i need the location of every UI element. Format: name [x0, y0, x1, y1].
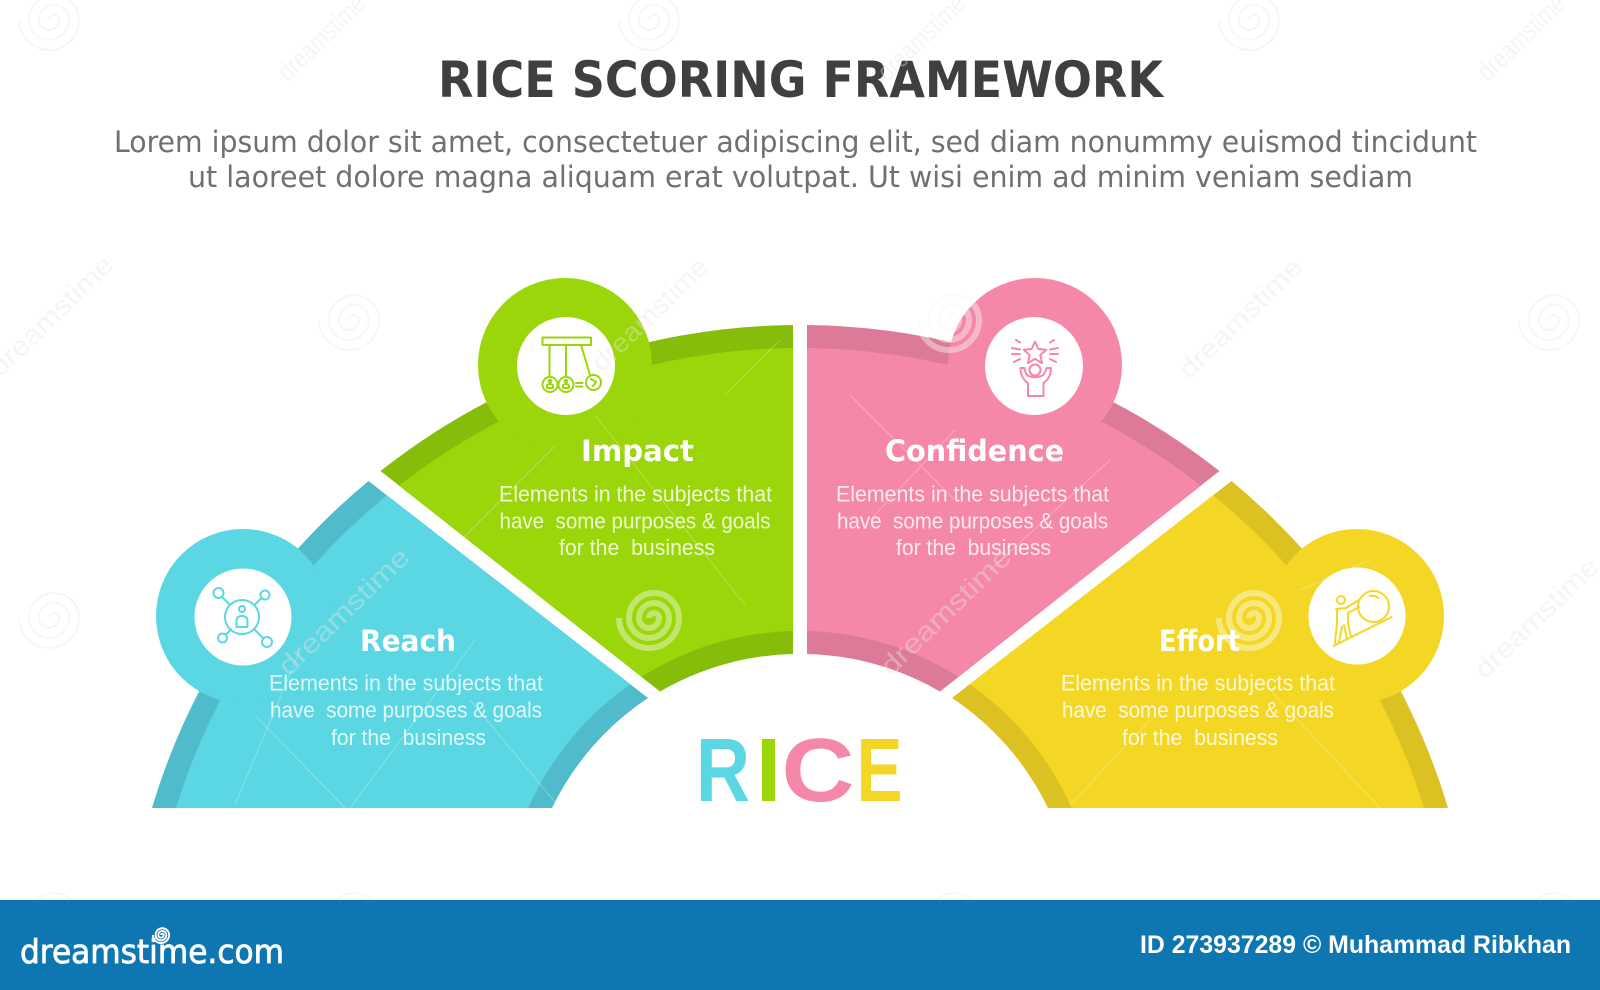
- panel: effort: [952, 481, 1448, 808]
- heading: reach: Reach: [360, 624, 456, 658]
- subtitle text block: [114, 125, 1477, 194]
- RICE centre wordmark: R: [696, 721, 750, 821]
- body text: reach: for the business: [331, 725, 486, 750]
- icon: newton cradle: [542, 338, 601, 392]
- body text: reach: Elements in the subjects that: [269, 670, 544, 696]
- heading: impact: Impact: [581, 434, 694, 468]
- body text: impact: have some purposes & goals: [500, 508, 770, 534]
- watermark pattern: dreamstime: [272, 542, 415, 681]
- body text: impact: for the business: [559, 535, 715, 560]
- icon: star and raised hands: [1012, 340, 1058, 396]
- watermark pattern: dreamstime: [874, 542, 1017, 681]
- heading: confidence: Confidence: [885, 434, 1064, 468]
- watermark pattern: dreamstime: [1468, 552, 1600, 684]
- heading: effort: Effort: [1159, 624, 1240, 658]
- body text: impact: Elements in the subjects that: [499, 482, 773, 506]
- footer credit: ID 273937289 © Muhammad Ribkhan: [1140, 931, 1571, 959]
- body text: confidence: for the business: [896, 535, 1051, 560]
- body text: confidence: [836, 482, 1110, 560]
- panel: reach: [152, 481, 648, 808]
- footer logo: dreamstime: dreamstime.com: [20, 932, 284, 971]
- subtitle text block: Lorem ipsum dolor sit amet, consectetuer adipiscing elit, sed diam nonummy euismod tincidunt: [114, 125, 1477, 159]
- subtitle text block: ut laoreet dolore magna aliquam erat volutpat. Ut wisi enim ad minim veniam sediam: [188, 160, 1413, 194]
- icon: person pushing boulder: [1334, 591, 1392, 646]
- RICE centre wordmark: I: [756, 721, 781, 821]
- footer bar: [0, 900, 1600, 990]
- RICE centre wordmark: E: [856, 721, 902, 821]
- body text: effort: Elements in the subjects that: [1061, 670, 1336, 696]
- RICE centre wordmark: [696, 721, 902, 821]
- body text: effort: have some purposes & goals: [1062, 698, 1334, 722]
- icon: network person: [214, 588, 272, 647]
- watermark pattern: dreamstime: [1172, 252, 1308, 384]
- body text: reach: have some purposes & goals: [270, 698, 542, 722]
- RICE centre wordmark: C: [782, 721, 854, 821]
- watermark pattern: dreamstime: [585, 252, 714, 377]
- body text: confidence: Elements in the subjects that: [836, 482, 1110, 506]
- title: RICE SCORING FRAMEWORK: [438, 51, 1165, 109]
- body text: impact: [499, 482, 773, 560]
- body text: reach: [269, 670, 544, 750]
- body text: confidence: have some purposes & goals: [837, 508, 1108, 534]
- panel: confidence: [807, 278, 1219, 692]
- body text: effort: for the business: [1122, 725, 1278, 750]
- body text: effort: [1061, 670, 1336, 750]
- panel: impact: [381, 278, 793, 692]
